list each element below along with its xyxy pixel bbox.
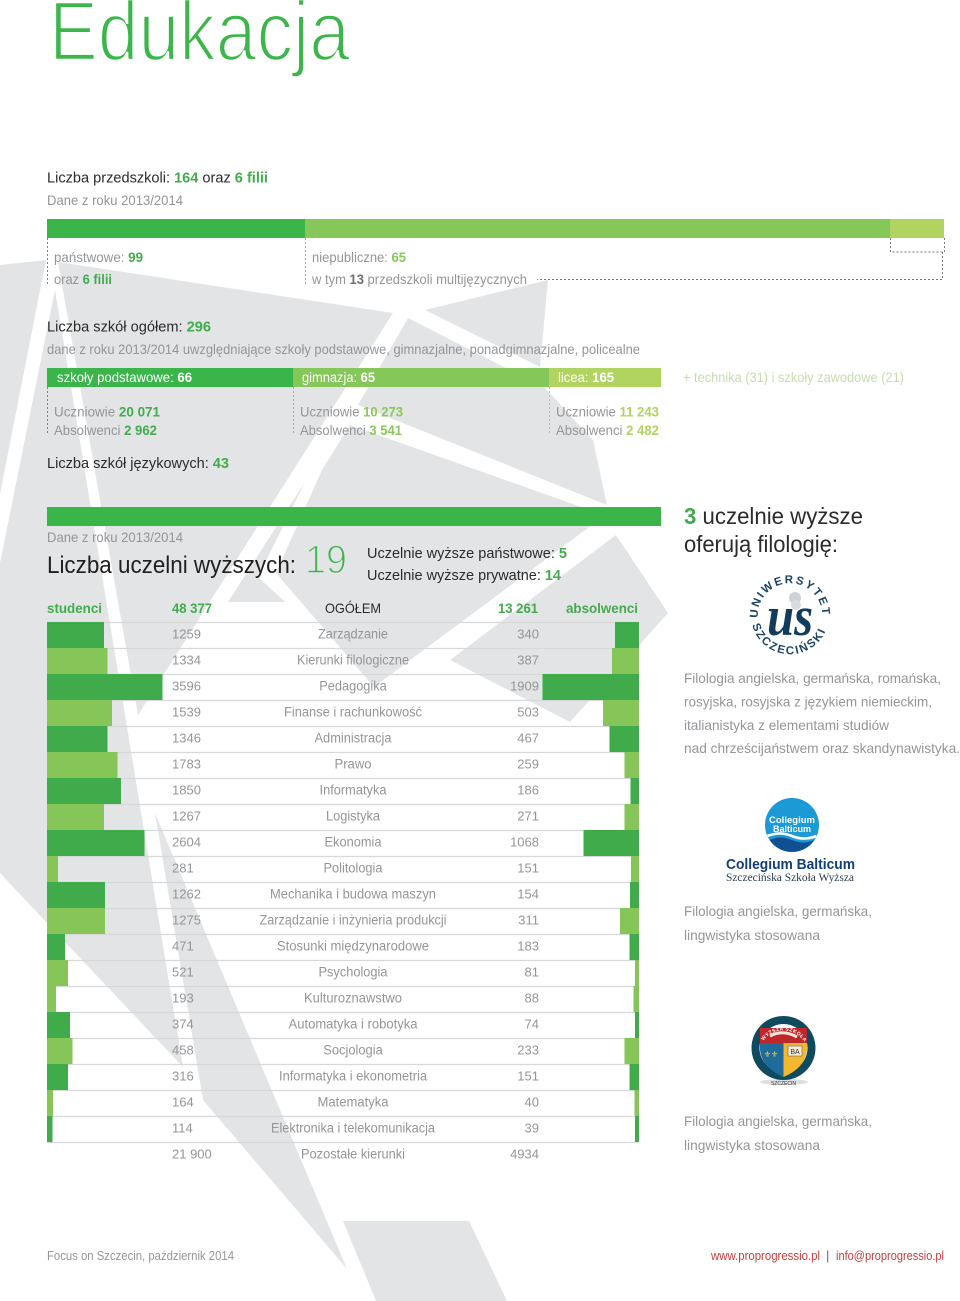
row: Pedagogika: 3596 bbox=[172, 678, 201, 694]
row: Informatyka i ekonometria bbox=[47, 1064, 639, 1090]
row: Psychologia: Psychologia bbox=[318, 964, 388, 980]
heading: philology bbox=[684, 503, 863, 557]
row: Mechanika i budowa maszyn: 154 bbox=[517, 886, 539, 902]
row: Stosunki międzynarodowe: 471 bbox=[172, 938, 194, 954]
row: Logistyka bbox=[47, 804, 639, 830]
row: Pedagogika: 1909 bbox=[510, 678, 539, 694]
text: public preschools: państwowe: 99 bbox=[54, 249, 143, 265]
footer bbox=[47, 1248, 944, 1263]
row: Elektronika i telekomunikacja: 114 bbox=[172, 1120, 193, 1136]
row: Psychologia: 81 bbox=[525, 964, 539, 980]
text: private preschools: niepubliczne: 65 bbox=[312, 249, 406, 265]
row: Administracja: Administracja bbox=[314, 730, 392, 746]
row: Stosunki międzynarodowe: 183 bbox=[517, 938, 539, 954]
row: Automatyka i robotyka: 374 bbox=[172, 1016, 194, 1032]
text: Collegium philology bbox=[684, 903, 872, 943]
row: Psychologia: 521 bbox=[172, 964, 194, 980]
logo: Collegium Balticum bbox=[726, 798, 855, 884]
stacked bar: schools: gimnazja: 65 bbox=[302, 369, 375, 385]
panel: philology universities bbox=[684, 503, 960, 1153]
row: Ekonomia: 2604 bbox=[172, 834, 201, 850]
stats: middle schools: Absolwenci 3 541 bbox=[300, 422, 402, 438]
logo: Collegium Balticum: Collegium bbox=[769, 815, 815, 826]
row: Zarządzanie i inżynieria produkcji: Zarządzanie i inżynieria produkcji bbox=[260, 912, 446, 928]
row: Kulturoznawstwo: 193 bbox=[172, 990, 194, 1006]
row: Politologia: 151 bbox=[517, 860, 539, 876]
row: Socjologia: Socjologia bbox=[323, 1042, 383, 1058]
row: Automatyka i robotyka: 74 bbox=[525, 1016, 539, 1032]
text: Collegium philology: lingwistyka stosowana bbox=[684, 927, 820, 943]
row: Informatyka i ekonometria: Informatyka i ekonometria bbox=[279, 1068, 427, 1084]
row: Pozostałe kierunki bbox=[172, 1146, 539, 1162]
row: Informatyka i ekonometria: 316 bbox=[172, 1068, 194, 1084]
row: Politologia bbox=[47, 856, 639, 882]
stats: middle schools: Uczniowie 10 273 bbox=[300, 404, 403, 420]
text: data year: Dane z roku 2013/2014 bbox=[47, 192, 183, 208]
text: private universities: Uczelnie wyższe prywatne: 14 bbox=[367, 567, 562, 584]
row: Prawo: Prawo bbox=[334, 756, 372, 772]
row: Socjologia: 458 bbox=[172, 1042, 194, 1058]
background: grey geometric shards bbox=[0, 260, 668, 1301]
stats: high schools: Uczniowie 11 243 bbox=[556, 404, 659, 420]
row: Informatyka: 1850 bbox=[172, 782, 201, 798]
row: Administracja: 467 bbox=[517, 730, 539, 746]
row: Stosunki międzynarodowe bbox=[47, 934, 639, 960]
chart: students and graduates by field bbox=[47, 600, 639, 1162]
logo: Collegium Balticum: Collegium Balticum bbox=[726, 856, 855, 873]
row: Zarządzanie: Zarządzanie bbox=[318, 626, 388, 642]
row: Kulturoznawstwo bbox=[47, 986, 639, 1012]
stacked bar: preschools bbox=[47, 219, 944, 238]
footer: website: www.proprogressio.pl bbox=[710, 1248, 820, 1263]
logo: Collegium Balticum: Szczecińska Szkoła Wyższa bbox=[726, 872, 854, 884]
row: Prawo: 259 bbox=[517, 756, 539, 772]
panel: preschools bbox=[47, 170, 944, 287]
text: crest philology: lingwistyka stosowana bbox=[684, 1137, 820, 1153]
row: Mechanika i budowa maszyn bbox=[47, 882, 639, 908]
stats: high schools bbox=[556, 404, 659, 438]
row: Zarządzanie i inżynieria produkcji: 1275 bbox=[172, 912, 201, 928]
logo: Collegium Balticum: Balticum bbox=[773, 824, 811, 835]
chart header: studenci bbox=[47, 600, 102, 616]
row: Finanse i rachunkowość bbox=[47, 700, 639, 726]
footer: email: info@proprogressio.pl bbox=[836, 1248, 944, 1263]
row: Logistyka: 1267 bbox=[172, 808, 201, 824]
stats: primary schools: Uczniowie 20 071 bbox=[54, 404, 160, 420]
row: Administracja: 1346 bbox=[172, 730, 201, 746]
row: Prawo bbox=[47, 752, 639, 778]
text: Szczecin philology bbox=[684, 670, 960, 756]
row: Administracja bbox=[47, 726, 639, 752]
row: Finanse i rachunkowość: Finanse i rachunkowość bbox=[284, 704, 422, 720]
row: Matematyka: 164 bbox=[172, 1094, 194, 1110]
row: Zarządzanie bbox=[47, 622, 639, 648]
heading: philology: oferują filologię: bbox=[684, 531, 838, 557]
stats: primary schools: Absolwenci 2 962 bbox=[54, 422, 157, 438]
row: Kierunki filologiczne: Kierunki filologiczne bbox=[297, 652, 409, 668]
text: multilingual preschools: w tym 13 przedszkoli multijęzycznych bbox=[311, 271, 527, 287]
row: Kierunki filologiczne: 387 bbox=[517, 652, 539, 668]
row: Socjologia: 233 bbox=[517, 1042, 539, 1058]
heading: schools total: Liczba szkół ogółem: 296 bbox=[47, 318, 211, 336]
row: Matematyka: Matematyka bbox=[318, 1094, 389, 1110]
row: Politologia: Politologia bbox=[324, 860, 383, 876]
row: Zarządzanie i inżynieria produkcji: 311 bbox=[518, 912, 539, 928]
chart header bbox=[47, 600, 638, 616]
stats: high schools: Absolwenci 2 482 bbox=[556, 422, 659, 438]
row: Ekonomia: Ekonomia bbox=[324, 834, 382, 850]
text: schools note: dane z roku 2013/2014 uwzględniające szkoły podstawowe, gimnazjalne, ponadgimnazjalne, policealne bbox=[47, 341, 640, 357]
chart header: 48 377 bbox=[172, 600, 212, 616]
row: Kulturoznawstwo: 88 bbox=[525, 990, 539, 1006]
row: Mechanika i budowa maszyn: 1262 bbox=[172, 886, 201, 902]
row: Logistyka: Logistyka bbox=[326, 808, 380, 824]
row: Matematyka: 40 bbox=[525, 1094, 539, 1110]
logo: Wyższa Szkoła crest: SZCZECIN bbox=[771, 1081, 796, 1087]
row: Ekonomia: 1068 bbox=[510, 834, 539, 850]
row: Psychologia bbox=[47, 960, 639, 986]
row: Pedagogika: Pedagogika bbox=[319, 678, 387, 694]
logo: Wyższa Szkoła crest bbox=[752, 1016, 816, 1087]
row: Informatyka i ekonometria: 151 bbox=[517, 1068, 539, 1084]
stacked bar: schools bbox=[47, 368, 661, 387]
stats: middle schools bbox=[300, 404, 403, 438]
footer: source: Focus on Szczecin, październik 2014 bbox=[47, 1248, 234, 1263]
row: Finanse i rachunkowość: 1539 bbox=[172, 704, 201, 720]
footer: separator: | bbox=[826, 1248, 829, 1263]
row: Matematyka bbox=[47, 1090, 639, 1116]
row: Prawo: 1783 bbox=[172, 756, 201, 772]
row: Elektronika i telekomunikacja: Elektronika i telekomunikacja bbox=[271, 1120, 435, 1136]
text: crest philology bbox=[684, 1113, 872, 1153]
logo: Uniwersytet Szczeciński: us bbox=[767, 586, 813, 648]
row: Pozostałe kierunki: 4934 bbox=[510, 1146, 539, 1162]
logo: Wyższa Szkoła crest: ⚜⚜ bbox=[764, 1050, 778, 1059]
row: Stosunki międzynarodowe: Stosunki międzynarodowe bbox=[277, 938, 429, 954]
panel: schools bbox=[47, 318, 904, 472]
row: Automatyka i robotyka bbox=[47, 1012, 639, 1038]
logo: Wyższa Szkoła crest: WYŻSZA SZKOŁA bbox=[760, 1028, 806, 1042]
text: branches: oraz 6 filii bbox=[54, 271, 112, 287]
text: Szczecin philology: italianistyka z elementami studiów bbox=[684, 717, 890, 733]
row: Socjologia bbox=[47, 1038, 639, 1064]
row: Zarządzanie: 1259 bbox=[172, 626, 201, 642]
row: Ekonomia bbox=[47, 830, 639, 856]
row: Politologia: 281 bbox=[172, 860, 194, 876]
bar: higher education bbox=[47, 507, 661, 526]
text: Szczecin philology: rosyjska, rosyjska z językiem niemieckim, bbox=[684, 694, 932, 710]
chart header: OGÓŁEM bbox=[325, 600, 381, 616]
row: Logistyka: 271 bbox=[517, 808, 539, 824]
row: Informatyka: 186 bbox=[517, 782, 539, 798]
row: Kierunki filologiczne bbox=[47, 648, 639, 674]
row: Kulturoznawstwo: Kulturoznawstwo bbox=[304, 990, 402, 1006]
text: Szczecin philology: Filologia angielska, germańska, romańska, bbox=[684, 670, 941, 686]
logo: Wyższa Szkoła crest: BA bbox=[790, 1049, 800, 1056]
panel: higher education header bbox=[47, 507, 661, 584]
row: Zarządzanie i inżynieria produkcji bbox=[47, 908, 639, 934]
row: Informatyka bbox=[47, 778, 639, 804]
row: Zarządzanie: 340 bbox=[517, 626, 539, 642]
chart header: absolwenci bbox=[566, 600, 638, 616]
text: technical schools note: + technika (31) i szkoły zawodowe (21) bbox=[683, 369, 904, 385]
text: data year: Dane z roku 2013/2014 bbox=[47, 529, 183, 545]
row: Informatyka: Informatyka bbox=[320, 782, 387, 798]
row: Pozostałe kierunki: 21 900 bbox=[172, 1146, 212, 1162]
chart header: 13 261 bbox=[498, 600, 538, 616]
row: Finanse i rachunkowość: 503 bbox=[517, 704, 539, 720]
logo: Uniwersytet Szczeciński: SZCZECIŃSKI bbox=[752, 623, 826, 654]
row: Automatyka i robotyka: Automatyka i robotyka bbox=[288, 1016, 418, 1032]
text: Szczecin philology: nad chrześcijaństwem oraz skandynawistyka. bbox=[684, 740, 960, 756]
text: public universities: Uczelnie wyższe państwowe: 5 bbox=[367, 545, 567, 562]
row: Mechanika i budowa maszyn: Mechanika i budowa maszyn bbox=[270, 886, 436, 902]
number: 19: 19 bbox=[305, 538, 347, 582]
heading: preschools count: Liczba przedszkoli: 164 oraz 6 filii bbox=[47, 170, 268, 186]
row: Kierunki filologiczne: 1334 bbox=[172, 652, 201, 668]
stacked bar: schools: licea: 165 bbox=[558, 369, 614, 385]
stats: primary schools bbox=[54, 404, 160, 438]
row: Pozostałe kierunki: Pozostałe kierunki bbox=[301, 1146, 405, 1162]
logo: Uniwersytet Szczeciński bbox=[750, 575, 830, 654]
heading: language schools: Liczba szkół językowych: 43 bbox=[47, 455, 229, 472]
row: Pedagogika bbox=[47, 674, 639, 700]
stacked bar: schools: szkoły podstawowe: 66 bbox=[57, 369, 192, 385]
text: Collegium philology: Filologia angielska, germańska, bbox=[684, 903, 872, 919]
heading: universities count: Liczba uczelni wyższych: bbox=[47, 552, 296, 579]
heading: philology: 3 uczelnie wyższe bbox=[684, 503, 863, 529]
row: Elektronika i telekomunikacja: 39 bbox=[525, 1120, 539, 1136]
row: Elektronika i telekomunikacja bbox=[47, 1116, 639, 1142]
text: crest philology: Filologia angielska, germańska, bbox=[684, 1113, 872, 1129]
logo: Uniwersytet Szczeciński: UNIWERSYTET bbox=[750, 575, 830, 618]
